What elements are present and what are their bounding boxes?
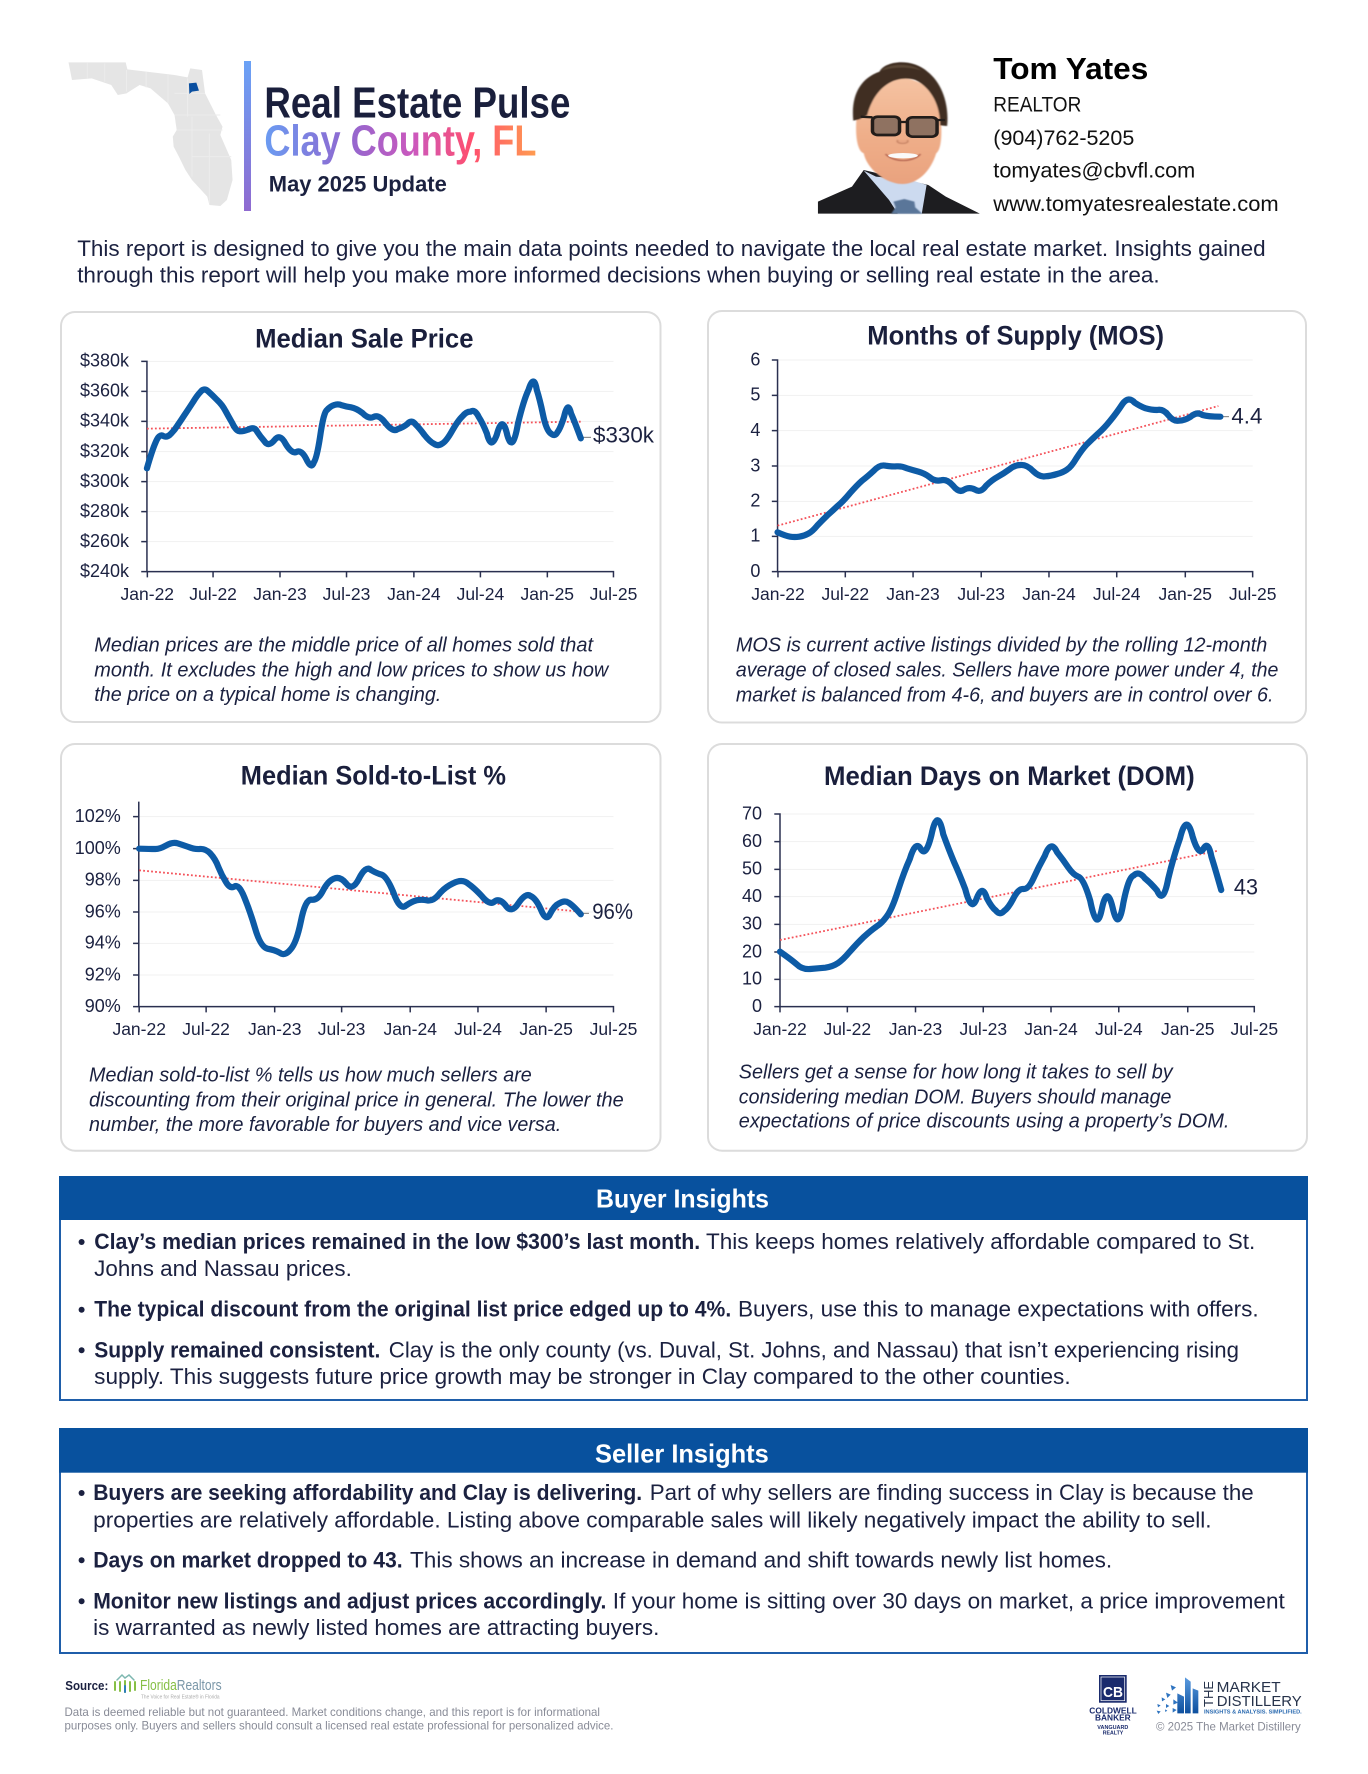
line chart: months of supply: 6 (750, 349, 760, 369)
line chart: months of supply (750, 349, 1277, 604)
caption: sold-to-list: Median sold-to-list % tells us how much sellers are (89, 1065, 532, 1087)
logo: Coldwell Banker Vanguard Realty: REALTY (1103, 1731, 1124, 1737)
line chart: median sale price: Jul-23 (323, 584, 370, 604)
line chart: sold-to-list: Jan-25 (519, 1019, 573, 1039)
panel: Seller Insights (59, 1428, 1308, 1653)
line chart: sold-to-list: 100% (75, 838, 121, 858)
header bar: Seller Insights (59, 1428, 1308, 1473)
line chart: median sale price: $380k (80, 351, 130, 371)
disclaimer: Data is deemed reliable but not guaranteed. Market conditions change, and this report is for informational (64, 1705, 600, 1719)
line chart: sold-to-list: Jan-22 (112, 1019, 166, 1039)
bullet: monitor new listings: Monitor new listings and adjust prices accordingly. (93, 1588, 606, 1613)
line chart: days on market: 40 (742, 886, 762, 906)
line chart: days on market: 43 (1234, 874, 1258, 899)
line chart: days on market: 70 (742, 803, 762, 823)
caption: median price: the price on a typical home is changing. (94, 684, 441, 706)
line chart: median sale price: $260k (80, 531, 130, 551)
title: Real Estate Pulse (264, 78, 570, 127)
logo: Coldwell Banker Vanguard Realty (1089, 1675, 1137, 1737)
line chart: days on market: 10 (742, 969, 762, 989)
caption: median price (94, 635, 610, 706)
line chart: months of supply: Jul-23 (957, 584, 1005, 604)
line chart: days on market: Jul-25 (1230, 1019, 1278, 1039)
header bar: Buyer Insights (59, 1176, 1308, 1220)
bullet: supply consistent: Clay is the only county (vs. Duval, St. Johns, and Nassau) that isn’t experiencing rising (389, 1337, 1239, 1362)
line chart: sold-to-list: 98% (85, 870, 121, 890)
panel: Median Sale Price (61, 312, 660, 722)
bullet: supply consistent: supply. This suggests future price growth may be stronger in Clay compared to the other counties. (94, 1364, 1071, 1389)
caption: sold-to-list: discounting from their original price in general. The lower the (89, 1090, 624, 1112)
line chart: median sale price: $340k (80, 411, 130, 431)
line chart: median sale price: $360k (80, 381, 130, 401)
line chart: months of supply: 5 (750, 385, 760, 405)
line chart: months of supply: Jan-23 (886, 584, 940, 604)
logo: Coldwell Banker Vanguard Realty: COLDWELL (1089, 1705, 1137, 1715)
title (264, 78, 570, 197)
source line with Florida Realtors logo: The Voice for Real Estate® in Florida (141, 1694, 220, 1701)
bullet: typical discount (79, 1297, 1259, 1322)
panel: Buyer Insights (59, 1176, 1308, 1400)
bullet: days on market (79, 1547, 1112, 1572)
intro text (77, 236, 1266, 288)
line chart: months of supply: 0 (750, 561, 760, 581)
logo: The Market Distillery: INSIGHTS & ANALYSIS. SIMPLIFIED. (1204, 1709, 1302, 1715)
bullet: low $300s (79, 1229, 1255, 1281)
line chart: sold-to-list: 96% (592, 899, 633, 924)
line chart: days on market: 20 (742, 941, 762, 961)
logo: Coldwell Banker Vanguard Realty: CB (1103, 1684, 1123, 1701)
line chart: months of supply: Jan-22 (751, 584, 805, 604)
line chart: days on market: Jul-23 (959, 1019, 1007, 1039)
bullet: low $300s: Clay’s median prices remained in the low $300’s last month. (94, 1229, 700, 1254)
line chart: sold-to-list: Jul-22 (182, 1019, 230, 1039)
line chart: median sale price: Jan-24 (387, 584, 441, 604)
caption: MOS (736, 635, 1278, 707)
line chart: months of supply: Jan-24 (1022, 584, 1076, 604)
line chart: sold-to-list: Jul-24 (454, 1019, 502, 1039)
title: Clay County, FL (264, 117, 536, 166)
line chart: sold-to-list: 92% (85, 964, 121, 984)
bullet: affordability (79, 1480, 1254, 1532)
line chart: sold-to-list (75, 802, 637, 1039)
icon: Florida Realtors logo mark (115, 1675, 135, 1692)
caption: MOS: MOS is current active listings divided by the rolling 12-month (736, 635, 1267, 657)
line chart: days on market: Jul-22 (823, 1019, 871, 1039)
line chart: median sale price: $240k (80, 561, 130, 581)
icon: distillery buildings (1157, 1677, 1198, 1714)
caption: median price: Median prices are the middle price of all homes sold that (94, 635, 594, 657)
line chart: days on market: Jan-24 (1024, 1019, 1078, 1039)
bullet: days on market: This shows an increase in demand and shift towards newly list homes. (410, 1547, 1112, 1572)
line chart: sold-to-list: 96% (85, 901, 121, 921)
line chart: months of supply: 1 (750, 526, 760, 546)
line chart: sold-to-list: Jul-23 (318, 1019, 365, 1039)
agent contact details: REALTOR (993, 94, 1081, 117)
caption: sold-to-list (89, 1065, 624, 1136)
agent contact details: tomyates@cbvfl.com (993, 160, 1195, 183)
line chart: days on market: Jul-24 (1095, 1019, 1143, 1039)
panel: Months of Supply (708, 311, 1306, 722)
bullet: affordability: Part of why sellers are finding success in Clay is because the (650, 1480, 1254, 1505)
line chart: median sale price: $320k (80, 441, 130, 461)
line chart: days on market: 0 (752, 996, 762, 1016)
gradient divider bar (244, 61, 251, 211)
bullet: monitor new listings: If your home is sitting over 30 days on market, a price improvement (613, 1588, 1285, 1613)
panel: Median Days on Market (708, 744, 1307, 1151)
line chart: months of supply: Jul-22 (821, 584, 869, 604)
source line with Florida Realtors logo: Source: (65, 1679, 108, 1693)
caption: DOM (739, 1061, 1229, 1133)
line chart: median sale price: $280k (80, 501, 130, 521)
bullet: affordability: Buyers are seeking affordability and Clay is delivering. (93, 1480, 642, 1505)
line chart: sold-to-list: 102% (75, 806, 121, 826)
line chart: months of supply: 2 (750, 491, 760, 511)
logo: The Market Distillery: DISTILLERY (1217, 1693, 1302, 1710)
agent contact details (992, 51, 1279, 216)
line chart: days on market: Jan-22 (753, 1019, 807, 1039)
line chart: median sale price (80, 351, 655, 604)
panel: Median Sold-to-List (61, 744, 660, 1151)
caption: sold-to-list: number, the more favorable for buyers and vice versa. (89, 1114, 561, 1136)
bullet: low $300s: This keeps homes relatively affordable compared to St. (706, 1229, 1255, 1254)
disclaimer (64, 1705, 614, 1732)
caption: median price: month. It excludes the high and low prices to show us how (94, 660, 610, 682)
source line with Florida Realtors logo (65, 1675, 222, 1701)
logo: The Market Distillery: © 2025 The Market Distillery (1156, 1720, 1301, 1734)
title: May 2025 Update (269, 172, 447, 197)
line chart: median sale price: Jan-22 (121, 584, 174, 604)
line chart: months of supply: 4 (750, 420, 760, 440)
line chart: months of supply: Jul-24 (1093, 584, 1141, 604)
line chart: median sale price: Jan-25 (521, 584, 574, 604)
line chart: sold-to-list: Jan-24 (383, 1019, 437, 1039)
heading: Median Sale Price: Median Sale Price (255, 324, 474, 354)
logo: Coldwell Banker Vanguard Realty: BANKER (1095, 1713, 1131, 1723)
line chart: days on market: 30 (742, 914, 762, 934)
line chart: months of supply: 3 (750, 455, 760, 475)
line chart: median sale price: Jul-24 (457, 584, 504, 604)
line chart: sold-to-list: 94% (85, 933, 121, 953)
logo: The Market Distillery (1156, 1677, 1302, 1734)
caption: MOS: market is balanced from 4-6, and buyers are in control over 6. (736, 685, 1274, 707)
agent contact details: www.tomyatesrealestate.com (992, 193, 1279, 216)
logo: The Market Distillery: THE (1201, 1681, 1216, 1707)
caption: DOM: Sellers get a sense for how long it takes to sell by (739, 1061, 1174, 1083)
bullet: typical discount: The typical discount from the original list price edged up to 4%. (94, 1297, 731, 1322)
line chart: median sale price: Jan-23 (253, 584, 307, 604)
heading: Median Sold-to-List %: Median Sold-to-List % (241, 760, 506, 790)
line chart: sold-to-list: 90% (85, 996, 121, 1016)
line chart: sold-to-list: Jan-23 (248, 1019, 301, 1039)
bullet: supply consistent (79, 1337, 1239, 1389)
line chart: days on market: Jan-23 (889, 1019, 942, 1039)
line chart: months of supply: Jul-25 (1229, 584, 1277, 604)
line chart: days on market: 60 (742, 831, 762, 851)
agent contact details: (904)762-5205 (993, 127, 1134, 150)
line chart: median sale price: $300k (80, 471, 130, 491)
line chart: median sale price: Jul-22 (189, 584, 237, 604)
agent photo (818, 62, 980, 214)
logo: The Market Distillery: MARKET (1217, 1679, 1281, 1696)
line chart: days on market: 50 (742, 859, 762, 879)
source line with Florida Realtors logo: FloridaRealtors (140, 1677, 222, 1694)
bullet: typical discount: Buyers, use this to manage expectations with offers. (738, 1297, 1259, 1322)
caption: DOM: considering median DOM. Buyers should manage (739, 1086, 1171, 1108)
line chart: days on market: Jan-25 (1161, 1019, 1215, 1039)
caption: DOM: expectations of price discounts using a property’s DOM. (739, 1111, 1229, 1133)
agent contact details: Tom Yates (993, 51, 1148, 86)
line chart: sold-to-list: Jul-25 (590, 1019, 637, 1039)
caption: MOS: average of closed sales. Sellers have more power under 4, the (736, 660, 1278, 682)
header bar: Buyer Insights: Buyer Insights (596, 1184, 769, 1214)
logo: Coldwell Banker Vanguard Realty: VANGUARD (1097, 1725, 1128, 1731)
bullet: monitor new listings: is warranted as newly listed homes are attracting buyers. (93, 1615, 659, 1640)
bullet: affordability: properties are relatively affordable. Listing above comparable sales will likely negatively impact the ability to sell. (93, 1507, 1212, 1532)
line chart: median sale price: Jul-25 (590, 584, 637, 604)
line chart: months of supply: 4.4 (1231, 403, 1262, 428)
line chart: days on market (742, 803, 1278, 1039)
bullet: days on market: Days on market dropped to 43. (93, 1547, 403, 1572)
intro text: through this report will help you make more informed decisions when buying or selling real estate in the area. (77, 263, 1160, 288)
line chart: median sale price: $330k (593, 423, 655, 448)
icon: Florida map with Clay County highlighted (68, 62, 233, 206)
header bar: Seller Insights: Seller Insights (595, 1438, 769, 1468)
disclaimer: purposes only. Buyers and sellers should consult a licensed real estate professional for personalized advice. (64, 1718, 614, 1732)
bullet: monitor new listings (79, 1588, 1285, 1640)
bullet: supply consistent: Supply remained consistent. (94, 1337, 380, 1362)
heading: Median Days on Market (DOM): Median Days on Market (DOM) (824, 761, 1195, 791)
line chart: months of supply: Jan-25 (1159, 584, 1212, 604)
heading: Months of Supply (MOS): Months of Supply (MOS) (867, 320, 1164, 350)
bullet: low $300s: Johns and Nassau prices. (94, 1256, 352, 1281)
intro text: This report is designed to give you the main data points needed to navigate the local real estate market. Insights gained (77, 236, 1266, 261)
